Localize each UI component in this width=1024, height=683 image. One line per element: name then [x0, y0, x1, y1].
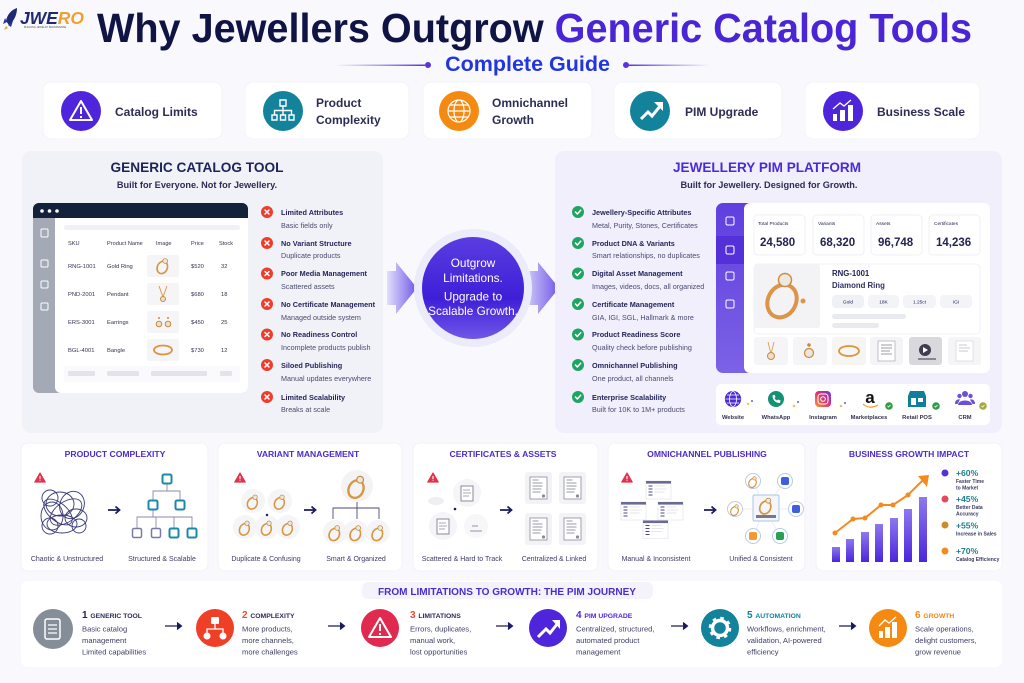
duplicate rings — [233, 489, 300, 539]
arrow — [304, 506, 316, 514]
step 3: Errors, duplicates, — [410, 624, 471, 634]
list: limitations: Limited Attributes — [281, 208, 343, 217]
impact stats: Faster Time — [956, 479, 984, 485]
impact stats: Catalog Efficiency — [956, 557, 1000, 563]
stat cards: 14,236 — [936, 237, 971, 249]
step 5: validation, AI-powered — [747, 636, 822, 645]
list: limitations — [261, 206, 376, 414]
top nav row — [43, 82, 980, 139]
impact stats: +55% — [956, 520, 979, 530]
nav card: Product Complexity: Product — [316, 96, 361, 110]
stat cards: 96,748 — [878, 237, 914, 249]
table mockup: Product Name — [107, 241, 143, 247]
list: pim capabilities: Smart relationships, no duplicates — [592, 251, 700, 260]
step 2: More products, — [242, 624, 293, 634]
bar chart — [832, 497, 927, 562]
step 5: 5 AUTOMATION — [747, 610, 801, 621]
step 3: manual work, — [410, 636, 455, 645]
captions — [31, 556, 196, 563]
captions: Scattered & Hard to Track — [422, 556, 503, 563]
table mockup: Price — [191, 241, 204, 247]
nav card: Catalog Limits — [43, 82, 222, 139]
arrow — [839, 622, 856, 630]
arrow — [165, 622, 182, 630]
step 6 — [869, 609, 977, 656]
channel labels: Instagram — [809, 415, 837, 421]
nav card: Product Complexity: Complexity — [316, 113, 381, 127]
nav card: PIM Upgrade — [614, 82, 782, 139]
list: pim capabilities: Omnichannel Publishing — [592, 361, 678, 370]
stat cards: Certificates — [934, 221, 959, 227]
stat cards: Total Products — [758, 221, 789, 227]
channel strip — [716, 384, 990, 425]
subheading: Built for Jewellery. Designed for Growth. — [681, 180, 857, 190]
impact stats: +45% — [956, 494, 979, 504]
panel: product complexity — [21, 443, 208, 571]
channel labels — [722, 415, 972, 421]
nav card: Omnichannel Growth: Omnichannel — [492, 96, 568, 110]
list: pim capabilities: Images, videos, docs, all organized — [592, 282, 704, 291]
list: pim capabilities: Product DNA & Variants — [592, 239, 675, 248]
step 1: management — [82, 636, 127, 645]
central callout: outgrow limitations: Scalable Growth. — [428, 304, 518, 318]
captions: Smart & Organized — [326, 556, 386, 563]
table mockup: ERS-3001 — [68, 320, 95, 326]
product detail card: RNG-1001 — [832, 269, 870, 278]
scattered documents — [428, 479, 488, 540]
channel labels: Marketplaces — [851, 415, 887, 421]
list: limitations: Siloed Publishing — [281, 361, 342, 370]
icon: marketplaces: a — [865, 388, 875, 407]
list: pim capabilities: Metal, Purity, Stones, Certificates — [592, 221, 698, 230]
panel: business growth impact — [816, 443, 1002, 571]
impact stats: Accuracy — [956, 512, 979, 518]
table mockup: Bangle — [107, 348, 125, 354]
table mockup: $450 — [191, 320, 204, 326]
list: pim capabilities: Certificate Management — [592, 300, 675, 309]
step 6: delight customers, — [915, 636, 977, 645]
table mockup: RNG-1001 — [68, 264, 96, 270]
step 2: 2 COMPLEXITY — [242, 610, 295, 621]
product detail card — [754, 264, 980, 334]
captions: Structured & Scalable — [128, 556, 196, 563]
list: limitations: Breaks at scale — [281, 405, 330, 414]
step 5: efficiency — [747, 648, 779, 656]
heading: OMNICHANNEL PUBLISHING — [647, 449, 767, 459]
step 4: management — [576, 648, 621, 656]
panel: omnichannel publishing — [608, 443, 805, 571]
icon: website — [726, 392, 740, 406]
arrow — [496, 622, 512, 630]
panel: variant management — [218, 443, 402, 571]
logo: JWERO: JWERO — [20, 8, 84, 28]
tree diagram — [132, 474, 196, 538]
table mockup: BGL-4001 — [68, 348, 94, 354]
captions — [422, 556, 586, 563]
list: limitations: Basic fields only — [281, 221, 333, 230]
nav card: Business Scale: Business Scale — [877, 105, 965, 119]
step 4 — [529, 609, 655, 656]
scattered windows — [621, 481, 683, 538]
table mockup: Image — [156, 241, 172, 247]
heading: VARIANT MANAGEMENT — [257, 449, 360, 459]
impact stats: +60% — [956, 468, 979, 478]
list: pim capabilities: GIA, IGI, SGL, Hallmark & more — [592, 313, 694, 322]
impact stats — [942, 468, 1000, 563]
arrow: right out of circle — [520, 262, 559, 314]
nav card: Catalog Limits: Catalog Limits — [115, 105, 198, 119]
organized rings — [323, 470, 390, 544]
table mockup: 32 — [221, 264, 227, 270]
list: limitations: Limited Scalability — [281, 393, 346, 402]
table mockup: Stock — [219, 241, 233, 247]
list: pim capabilities: Jewellery-Specific Attributes — [592, 208, 692, 217]
product detail card: 18K — [879, 300, 889, 306]
captions: Centralized & Linked — [522, 556, 586, 563]
heading: generic catalog tool: GENERIC CATALOG TOOL — [110, 159, 284, 175]
list: limitations: No Variant Structure — [281, 239, 352, 248]
heading: jewellery pim platform: JEWELLERY PIM PLATFORM — [673, 159, 861, 175]
list: limitations: Poor Media Management — [281, 269, 368, 278]
captions: Duplicate & Confusing — [231, 556, 301, 563]
list: limitations: Managed outside system — [281, 313, 361, 322]
table mockup: 25 — [221, 320, 227, 326]
panel: pim journey — [21, 581, 1002, 667]
impact stats: Increase in Sales — [956, 532, 997, 538]
table mockup: $730 — [191, 348, 204, 354]
tangle illustration — [39, 487, 89, 534]
subheading: Built for Everyone. Not for Jewellery. — [117, 180, 277, 190]
arrow — [500, 506, 512, 514]
nav card: PIM Upgrade: PIM Upgrade — [685, 105, 759, 119]
heading: BUSINESS GROWTH IMPACT — [849, 449, 970, 459]
list: limitations: No Certificate Management — [281, 300, 376, 309]
arrow — [328, 622, 344, 630]
nav card: Omnichannel Growth — [423, 82, 592, 139]
list: limitations: Duplicate products — [281, 251, 341, 260]
growth line — [832, 475, 929, 536]
table mockup: SKU — [68, 241, 80, 247]
list: pim capabilities — [572, 206, 704, 414]
nav card: Omnichannel Growth: Growth — [492, 113, 534, 127]
panel: generic catalog tool — [22, 151, 383, 433]
step 1: Limited capabilities — [82, 648, 146, 656]
panel: certificates and assets — [413, 443, 598, 571]
icon: crm — [955, 391, 975, 405]
media thumbnails — [754, 337, 981, 365]
heading pill — [362, 582, 653, 599]
table mockup: $680 — [191, 292, 204, 298]
list: pim capabilities: Digital Asset Management — [592, 269, 683, 278]
product photo: diamond ring — [762, 274, 806, 323]
list: limitations: Manual updates everywhere — [281, 374, 371, 383]
impact stats: +70% — [956, 546, 979, 556]
arrow — [108, 506, 120, 514]
list: pim capabilities: Enterprise Scalability — [592, 393, 667, 402]
arrow: left into circle — [387, 262, 417, 314]
list: limitations: Incomplete products publish — [281, 343, 370, 352]
icon: instagram — [815, 391, 831, 407]
captions: Manual & Inconsistent — [622, 556, 690, 563]
step 6: Scale operations, — [915, 624, 974, 634]
subtitle: Complete Guide: Complete Guide — [445, 52, 610, 76]
title: Why Jewellers Outgrow Generic Catalog Tools — [97, 5, 972, 51]
stat cards: Assets — [876, 221, 891, 227]
dashboard mockup — [716, 203, 990, 373]
arrow — [671, 622, 688, 630]
heading: PRODUCT COMPLEXITY — [65, 449, 166, 459]
product detail card: Gold — [843, 300, 853, 306]
icon: warning — [235, 473, 245, 482]
step 2: more channels, — [242, 636, 294, 645]
icon: warning — [428, 473, 438, 482]
stat cards: 68,320 — [820, 237, 855, 249]
channel labels: Website — [722, 415, 745, 421]
stat cards — [754, 215, 980, 255]
central callout: outgrow limitations — [414, 229, 532, 347]
heading: CERTIFICATES & ASSETS — [450, 449, 557, 459]
list: pim capabilities: One product, all channels — [592, 374, 674, 383]
channel labels: WhatsApp — [762, 415, 791, 421]
nav card: Business Scale — [805, 82, 980, 139]
central callout: outgrow limitations: Outgrow — [451, 256, 496, 270]
stat cards: 24,580 — [760, 237, 795, 249]
step 1 — [33, 609, 146, 656]
nav card: Product Complexity — [245, 82, 409, 139]
table mockup: Gold Ring — [107, 264, 133, 270]
icon: retail pos — [908, 391, 926, 407]
list: limitations: No Readiness Control — [281, 330, 357, 339]
list: pim capabilities: Product Readiness Score — [592, 330, 680, 339]
panel: jewellery pim platform — [555, 151, 1002, 433]
icon: warning — [622, 473, 632, 482]
list: pim capabilities: Built for 10K to 1M+ products — [592, 405, 685, 414]
step 5 — [701, 609, 826, 656]
subtitle: Complete Guide — [335, 52, 710, 76]
table mockup: 12 — [221, 348, 227, 354]
product detail card: IGI — [953, 300, 959, 306]
table mockup: $520 — [191, 264, 204, 270]
step 2: more challenges — [242, 648, 298, 656]
table mockup: Earrings — [107, 320, 129, 326]
captions — [622, 556, 793, 563]
table mockup: 18 — [221, 292, 227, 298]
organized certificates — [525, 472, 586, 545]
captions: Chaotic & Unstructured — [31, 556, 103, 563]
step 4: automated product — [576, 636, 640, 645]
step 6: 6 GROWTH — [915, 610, 954, 621]
arrow — [704, 506, 716, 514]
product detail card: Diamond Ring — [832, 281, 885, 290]
channel labels: CRM — [958, 415, 972, 421]
hub diagram — [728, 474, 804, 544]
step 3 — [361, 609, 471, 656]
product detail card: 1.25ct — [913, 300, 927, 306]
channel labels: Retail POS — [902, 415, 932, 421]
step 2 — [196, 609, 298, 656]
table mockup: Pendant — [107, 292, 129, 298]
central callout: outgrow limitations: Limitations. — [443, 271, 503, 285]
step 4: 4 PIM UPGRADE — [576, 610, 633, 621]
list: limitations: Scattered assets — [281, 282, 335, 291]
heading pill: FROM LIMITATIONS TO GROWTH: THE PIM JOURNEY — [378, 587, 636, 598]
icon: warning — [35, 473, 45, 482]
icon: marketplaces — [863, 388, 878, 407]
table mockup: PND-2001 — [68, 292, 95, 298]
impact stats: Better Data — [956, 505, 983, 511]
step 3: lost opportunities — [410, 648, 468, 656]
list: pim capabilities: Quality check before publishing — [592, 343, 692, 352]
captions: Unified & Consistent — [729, 556, 793, 563]
logo: JWERO: BUILDING JEWELRY BRANDVERSE — [24, 26, 66, 29]
captions — [231, 556, 386, 563]
impact stats: to Market — [956, 486, 979, 492]
stat cards: Variants — [818, 221, 836, 227]
step 4: Centralized, structured, — [576, 624, 655, 634]
central callout: outgrow limitations: Upgrade to — [444, 290, 503, 304]
icon: whatsapp — [768, 391, 784, 407]
step 6: grow revenue — [915, 648, 961, 656]
step 1: 1 GENERIC TOOL — [82, 610, 142, 621]
step 3: 3 LIMITATIONS — [410, 610, 461, 621]
step 1: Basic catalog — [82, 624, 127, 634]
table mockup — [33, 203, 248, 393]
step 5: Workflows, enrichment, — [747, 624, 826, 634]
status checks — [747, 400, 987, 410]
